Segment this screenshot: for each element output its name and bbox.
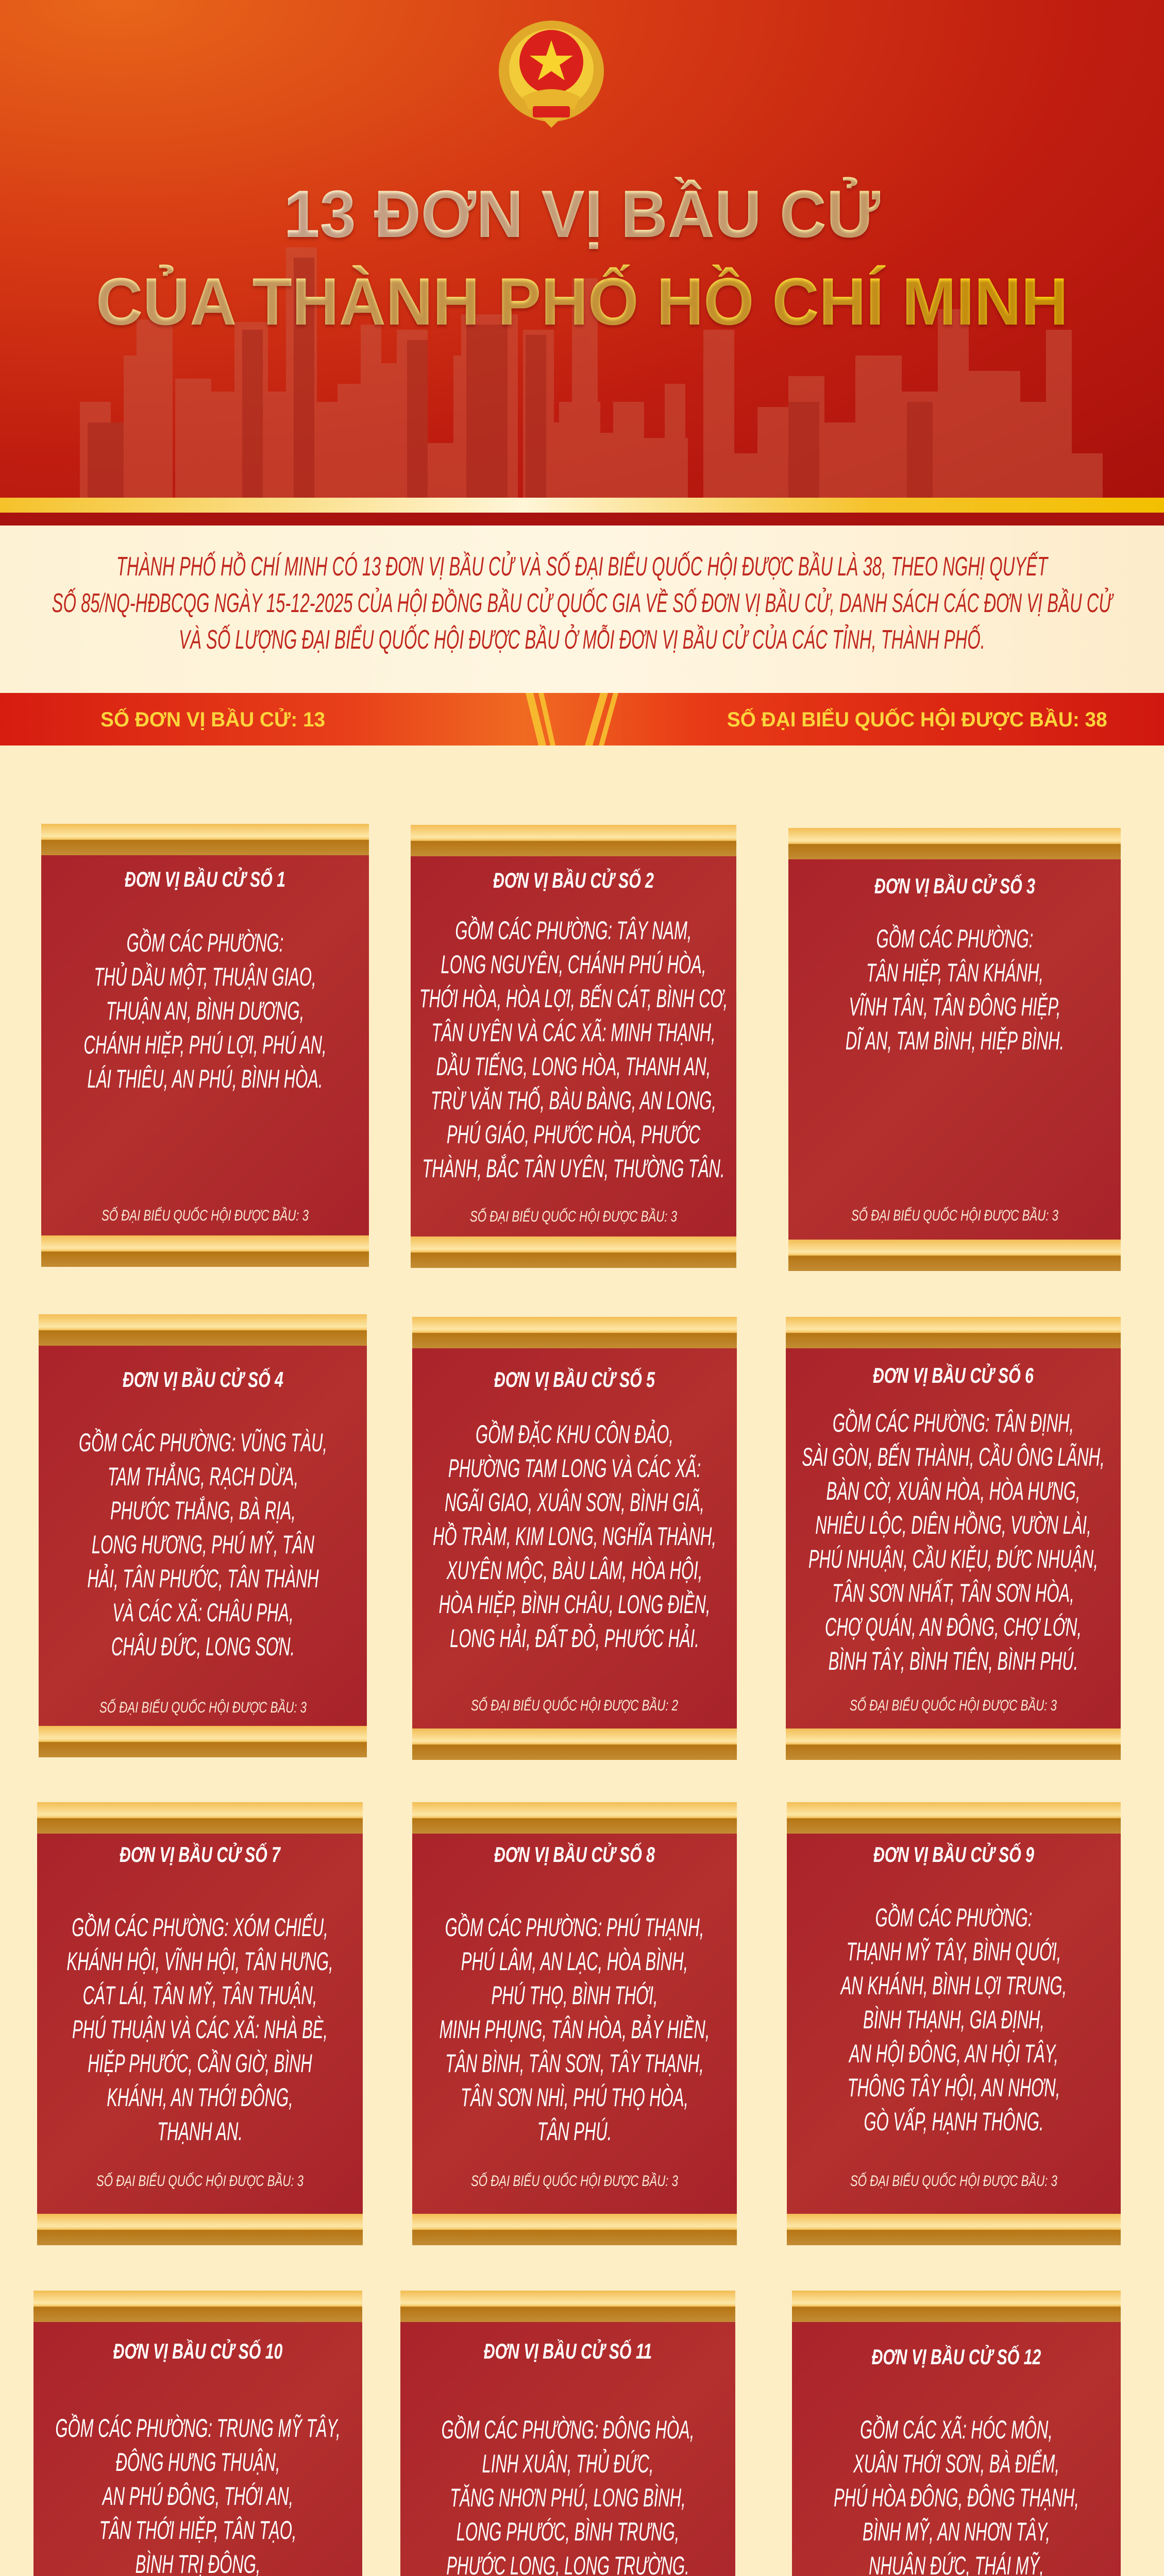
card: đơn vị 2: LONG NGUYÊN, CHÁNH PHÚ HÒA, — [441, 950, 706, 979]
card: đơn vị 9: SỐ ĐẠI BIỂU QUỐC HỘI ĐƯỢC BẦU: 3 — [850, 2173, 1057, 2190]
card: đơn vị 8 — [412, 1802, 737, 2245]
header background — [0, 0, 1164, 498]
card: đơn vị 7 — [37, 1802, 363, 2245]
card: đơn vị 6: GỒM CÁC PHƯỜNG: TÂN ĐỊNH, — [833, 1409, 1074, 1437]
emblem — [499, 21, 604, 128]
card: đơn vị 6: BÌNH TÂY, BÌNH TIÊN, BÌNH PHÚ. — [829, 1647, 1078, 1675]
card: đơn vị 2: ĐƠN VỊ BẦU CỬ SỐ 2 — [493, 868, 654, 892]
card: đơn vị 3 — [788, 828, 1121, 1271]
card: đơn vị 4: TAM THẮNG, RẠCH DỪA, — [107, 1462, 298, 1491]
card: đơn vị 7: GỒM CÁC PHƯỜNG: XÓM CHIẾU, — [72, 1913, 328, 1942]
card: đơn vị 8: SỐ ĐẠI BIỂU QUỐC HỘI ĐƯỢC BẦU: 3 — [471, 2173, 678, 2190]
card: đơn vị 10: GỒM CÁC PHƯỜNG: TRUNG MỸ TÂY, — [55, 2414, 341, 2443]
card: đơn vị 3: VĨNH TÂN, TÂN ĐÔNG HIỆP, — [849, 992, 1060, 1021]
card: đơn vị 3: GỒM CÁC PHƯỜNG: — [876, 924, 1033, 953]
card: đơn vị 2 — [411, 825, 736, 1268]
card: đơn vị 6: CHỢ QUÁN, AN ĐÔNG, CHỢ LỚN, — [825, 1613, 1082, 1641]
card: đơn vị 3: DĨ AN, TAM BÌNH, HIỆP BÌNH. — [845, 1026, 1064, 1055]
intro text: VÀ SỐ LƯỢNG ĐẠI BIỂU QUỐC HỘI ĐƯỢC BẦU Ở MỖI ĐƠN VỊ BẦU CỬ CỦA CÁC TỈNH, THÀNH PHỐ. — [179, 625, 985, 655]
card: đơn vị 1: ĐƠN VỊ BẦU CỬ SỐ 1 — [125, 867, 285, 891]
card: đơn vị 10 — [33, 2291, 362, 2576]
card: đơn vị 7: KHÁNH, AN THỚI ĐÔNG, — [107, 2083, 293, 2112]
card: đơn vị 5 — [412, 1317, 737, 1760]
card: đơn vị 9: GÒ VẤP, HẠNH THÔNG. — [864, 2107, 1044, 2136]
card: đơn vị 1: GỒM CÁC PHƯỜNG: — [127, 928, 283, 957]
card: đơn vị 4: HẢI, TÂN PHƯỚC, TÂN THÀNH — [87, 1564, 318, 1593]
card: đơn vị 10: ĐÔNG HƯNG THUẬN, — [115, 2448, 280, 2477]
card: đơn vị 1: LÁI THIÊU, AN PHÚ, BÌNH HÒA. — [87, 1064, 323, 1093]
intro text — [0, 526, 1164, 693]
card: đơn vị 12: BÌNH MỸ, AN NHƠN TÂY, — [863, 2517, 1050, 2546]
card: đơn vị 4: ĐƠN VỊ BẦU CỬ SỐ 4 — [123, 1367, 283, 1392]
card: đơn vị 2: DẦU TIẾNG, LONG HÒA, THANH AN, — [436, 1052, 711, 1081]
card: đơn vị 3: SỐ ĐẠI BIỂU QUỐC HỘI ĐƯỢC BẦU: 3 — [851, 1207, 1058, 1224]
card: đơn vị 5: LONG HẢI, ĐẤT ĐỎ, PHƯỚC HẢI. — [450, 1624, 699, 1653]
card: đơn vị 12: PHÚ HÒA ĐÔNG, ĐÔNG THẠNH, — [834, 2483, 1079, 2512]
card: đơn vị 7: ĐƠN VỊ BẦU CỬ SỐ 7 — [120, 1842, 280, 1867]
stat: number of units: SỐ ĐƠN VỊ BẦU CỬ: 13 — [100, 708, 325, 731]
card: đơn vị 9: GỒM CÁC PHƯỜNG: — [875, 1903, 1032, 1932]
title: CỦA THÀNH PHỐ HỒ CHÍ MINH — [96, 264, 1068, 339]
card: đơn vị 2: TÂN UYÊN VÀ CÁC XÃ: MINH THẠNH, — [431, 1018, 716, 1047]
card: đơn vị 2: GỒM CÁC PHƯỜNG: TÂY NAM, — [455, 916, 692, 945]
card: đơn vị 4: PHƯỚC THẮNG, BÀ RỊA, — [110, 1496, 295, 1525]
card: đơn vị 12: GỒM CÁC XÃ: HÓC MÔN, — [860, 2415, 1053, 2444]
card: đơn vị 5: XUYÊN MỘC, BÀU LÂM, HÒA HỘI, — [447, 1556, 702, 1585]
skyline illustration — [80, 247, 1103, 498]
card: đơn vị 5: PHƯỜNG TAM LONG VÀ CÁC XÃ: — [448, 1454, 701, 1483]
card: đơn vị 7: SỐ ĐẠI BIỂU QUỐC HỘI ĐƯỢC BẦU: 3 — [96, 2173, 303, 2190]
card: đơn vị 9: ĐƠN VỊ BẦU CỬ SỐ 9 — [873, 1842, 1034, 1867]
card: đơn vị 7: PHÚ THUẬN VÀ CÁC XÃ: NHÀ BÈ, — [72, 2015, 328, 2044]
card: đơn vị 7: KHÁNH HỘI, VĨNH HỘI, TÂN HƯNG, — [66, 1947, 333, 1976]
intro text: THÀNH PHỐ HỒ CHÍ MINH CÓ 13 ĐƠN VỊ BẦU CỬ VÀ SỐ ĐẠI BIỂU QUỐC HỘI ĐƯỢC BẦU LÀ 38, THEO NGHỊ QUYẾT — [116, 552, 1048, 582]
card: đơn vị 4: VÀ CÁC XÃ: CHÂU PHA, — [112, 1598, 293, 1627]
card: đơn vị 12: XUÂN THỚI SƠN, BÀ ĐIỂM, — [853, 2449, 1059, 2478]
card: đơn vị 4: CHÂU ĐỨC, LONG SƠN. — [111, 1632, 295, 1661]
card: đơn vị 2: SỐ ĐẠI BIỂU QUỐC HỘI ĐƯỢC BẦU: 3 — [470, 1208, 677, 1225]
card: đơn vị 10: AN PHÚ ĐÔNG, THỚI AN, — [103, 2482, 293, 2511]
card: đơn vị 6: BÀN CỜ, XUÂN HÒA, HÒA HƯNG, — [826, 1477, 1080, 1505]
card: đơn vị 4: GỒM CÁC PHƯỜNG: VŨNG TÀU, — [78, 1428, 327, 1457]
card: đơn vị 12 — [792, 2291, 1121, 2576]
card: đơn vị 1: SỐ ĐẠI BIỂU QUỐC HỘI ĐƯỢC BẦU: 3 — [102, 1207, 309, 1224]
card: đơn vị 6: NHIÊU LỘC, DIÊN HỒNG, VƯỜN LÀI, — [815, 1511, 1091, 1539]
card: đơn vị 3: ĐƠN VỊ BẦU CỬ SỐ 3 — [874, 874, 1035, 898]
card: đơn vị 8: ĐƠN VỊ BẦU CỬ SỐ 8 — [494, 1842, 655, 1867]
card: đơn vị 9: THÔNG TÂY HỘI, AN NHƠN, — [848, 2073, 1060, 2102]
card: đơn vị 8: MINH PHỤNG, TÂN HÒA, BẢY HIỀN, — [440, 2015, 710, 2044]
card: đơn vị 1: THUẬN AN, BÌNH DƯƠNG, — [106, 996, 304, 1025]
card: đơn vị 9 — [787, 1802, 1121, 2245]
card: đơn vị 11: GỒM CÁC PHƯỜNG: ĐÔNG HÒA, — [442, 2415, 694, 2444]
card: đơn vị 9: AN HỘI ĐÔNG, AN HỘI TÂY, — [849, 2039, 1058, 2068]
card: đơn vị 9: THẠNH MỸ TÂY, BÌNH QUỚI, — [847, 1937, 1061, 1966]
card: đơn vị 8: TÂN PHÚ. — [537, 2117, 612, 2146]
card: đơn vị 6: TÂN SƠN NHẤT, TÂN SƠN HÒA, — [832, 1579, 1074, 1607]
card: đơn vị 9: AN KHÁNH, BÌNH LỢI TRUNG, — [841, 1971, 1067, 2000]
card: đơn vị 8: PHÚ THỌ, BÌNH THỚI, — [491, 1981, 658, 2010]
card: đơn vị 12: ĐƠN VỊ BẦU CỬ SỐ 12 — [872, 2345, 1041, 2369]
card: đơn vị 9: BÌNH THẠNH, GIA ĐỊNH, — [863, 2005, 1044, 2034]
card: đơn vị 11 — [400, 2291, 735, 2576]
card: đơn vị 8: PHÚ LÂM, AN LẠC, HÒA BÌNH, — [461, 1947, 688, 1976]
card: đơn vị 6: SỐ ĐẠI BIỂU QUỐC HỘI ĐƯỢC BẦU: 3 — [850, 1697, 1057, 1714]
card: đơn vị 4 — [39, 1314, 367, 1757]
card: đơn vị 7: CÁT LÁI, TÂN MỸ, TÂN THUẬN, — [83, 1981, 317, 2010]
card: đơn vị 10: TÂN THỚI HIỆP, TÂN TẠO, — [99, 2516, 296, 2545]
card: đơn vị 11: LINH XUÂN, THỦ ĐỨC, — [482, 2449, 653, 2478]
card: đơn vị 2: TRỪ VĂN THỐ, BÀU BÀNG, AN LONG, — [431, 1086, 716, 1115]
title: 13 ĐƠN VỊ BẦU CỬ — [283, 176, 881, 251]
intro text: SỐ 85/NQ-HĐBCQG NGÀY 15-12-2025 CỦA HỘI ĐỒNG BẦU CỬ QUỐC GIA VỀ SỐ ĐƠN VỊ BẦU CỬ, DANH SÁCH CÁC ĐƠN VỊ BẦU CỬ — [52, 588, 1112, 618]
card: đơn vị 7: HIỆP PHƯỚC, CẦN GIỜ, BÌNH — [88, 2049, 312, 2078]
card: đơn vị 5: ĐƠN VỊ BẦU CỬ SỐ 5 — [494, 1367, 655, 1392]
summary bar — [0, 693, 1164, 745]
card: đơn vị 2: THỚI HÒA, HÒA LỢI, BẾN CÁT, BÌNH CƠ, — [419, 984, 728, 1013]
card: đơn vị 5: HÒA HIỆP, BÌNH CHÂU, LONG ĐIỀN, — [438, 1590, 711, 1619]
card: đơn vị 2: THÀNH, BẮC TÂN UYÊN, THƯỜNG TÂN. — [422, 1154, 725, 1183]
card: đơn vị 4: SỐ ĐẠI BIỂU QUỐC HỘI ĐƯỢC BẦU: 3 — [99, 1699, 307, 1716]
card: đơn vị 6: ĐƠN VỊ BẦU CỬ SỐ 6 — [873, 1363, 1034, 1387]
card: đơn vị 8: TÂN BÌNH, TÂN SƠN, TÂY THẠNH, — [445, 2049, 704, 2078]
card: đơn vị 3: TÂN HIỆP, TÂN KHÁNH, — [866, 958, 1043, 987]
card: đơn vị 1: CHÁNH HIỆP, PHÚ LỢI, PHÚ AN, — [83, 1030, 327, 1059]
card: đơn vị 8: GỒM CÁC PHƯỜNG: PHÚ THẠNH, — [445, 1913, 704, 1942]
title — [96, 176, 1068, 339]
card: đơn vị 5: SỐ ĐẠI BIỂU QUỐC HỘI ĐƯỢC BẦU: 2 — [471, 1697, 678, 1714]
card: đơn vị 11: TĂNG NHƠN PHÚ, LONG BÌNH, — [450, 2483, 686, 2512]
card: đơn vị 6 — [786, 1317, 1121, 1760]
card: đơn vị 5: NGÃI GIAO, XUÂN SƠN, BÌNH GIÃ, — [445, 1488, 704, 1517]
card: đơn vị 2: PHÚ GIÁO, PHƯỚC HÒA, PHƯỚC — [447, 1120, 700, 1149]
card: đơn vị 8: TÂN SƠN NHÌ, PHÚ THỌ HÒA, — [461, 2083, 688, 2112]
stat: number of deputies: SỐ ĐẠI BIỂU QUỐC HỘI ĐƯỢC BẦU: 38 — [727, 708, 1107, 731]
card: đơn vị 6: PHÚ NHUẬN, CẦU KIỆU, ĐỨC NHUẬN, — [808, 1545, 1098, 1573]
card: đơn vị 6: SÀI GÒN, BẾN THÀNH, CẦU ÔNG LÃNH, — [802, 1443, 1105, 1471]
card: đơn vị 7: THẠNH AN. — [157, 2117, 243, 2146]
card: đơn vị 5: GỒM ĐẶC KHU CÔN ĐẢO, — [476, 1420, 673, 1449]
card: đơn vị 5: HỒ TRÀM, KIM LONG, NGHĨA THÀNH, — [433, 1522, 716, 1551]
card: đơn vị 1 — [41, 824, 369, 1267]
card: đơn vị 1: THỦ DẦU MỘT, THUẬN GIAO, — [94, 962, 316, 991]
card: đơn vị 11: ĐƠN VỊ BẦU CỬ SỐ 11 — [484, 2339, 652, 2363]
card: đơn vị 11: LONG PHƯỚC, BÌNH TRƯNG, — [457, 2517, 679, 2546]
card: đơn vị 10: ĐƠN VỊ BẦU CỬ SỐ 10 — [113, 2339, 282, 2363]
card: đơn vị 4: LONG HƯƠNG, PHÚ MỸ, TÂN — [91, 1530, 314, 1559]
